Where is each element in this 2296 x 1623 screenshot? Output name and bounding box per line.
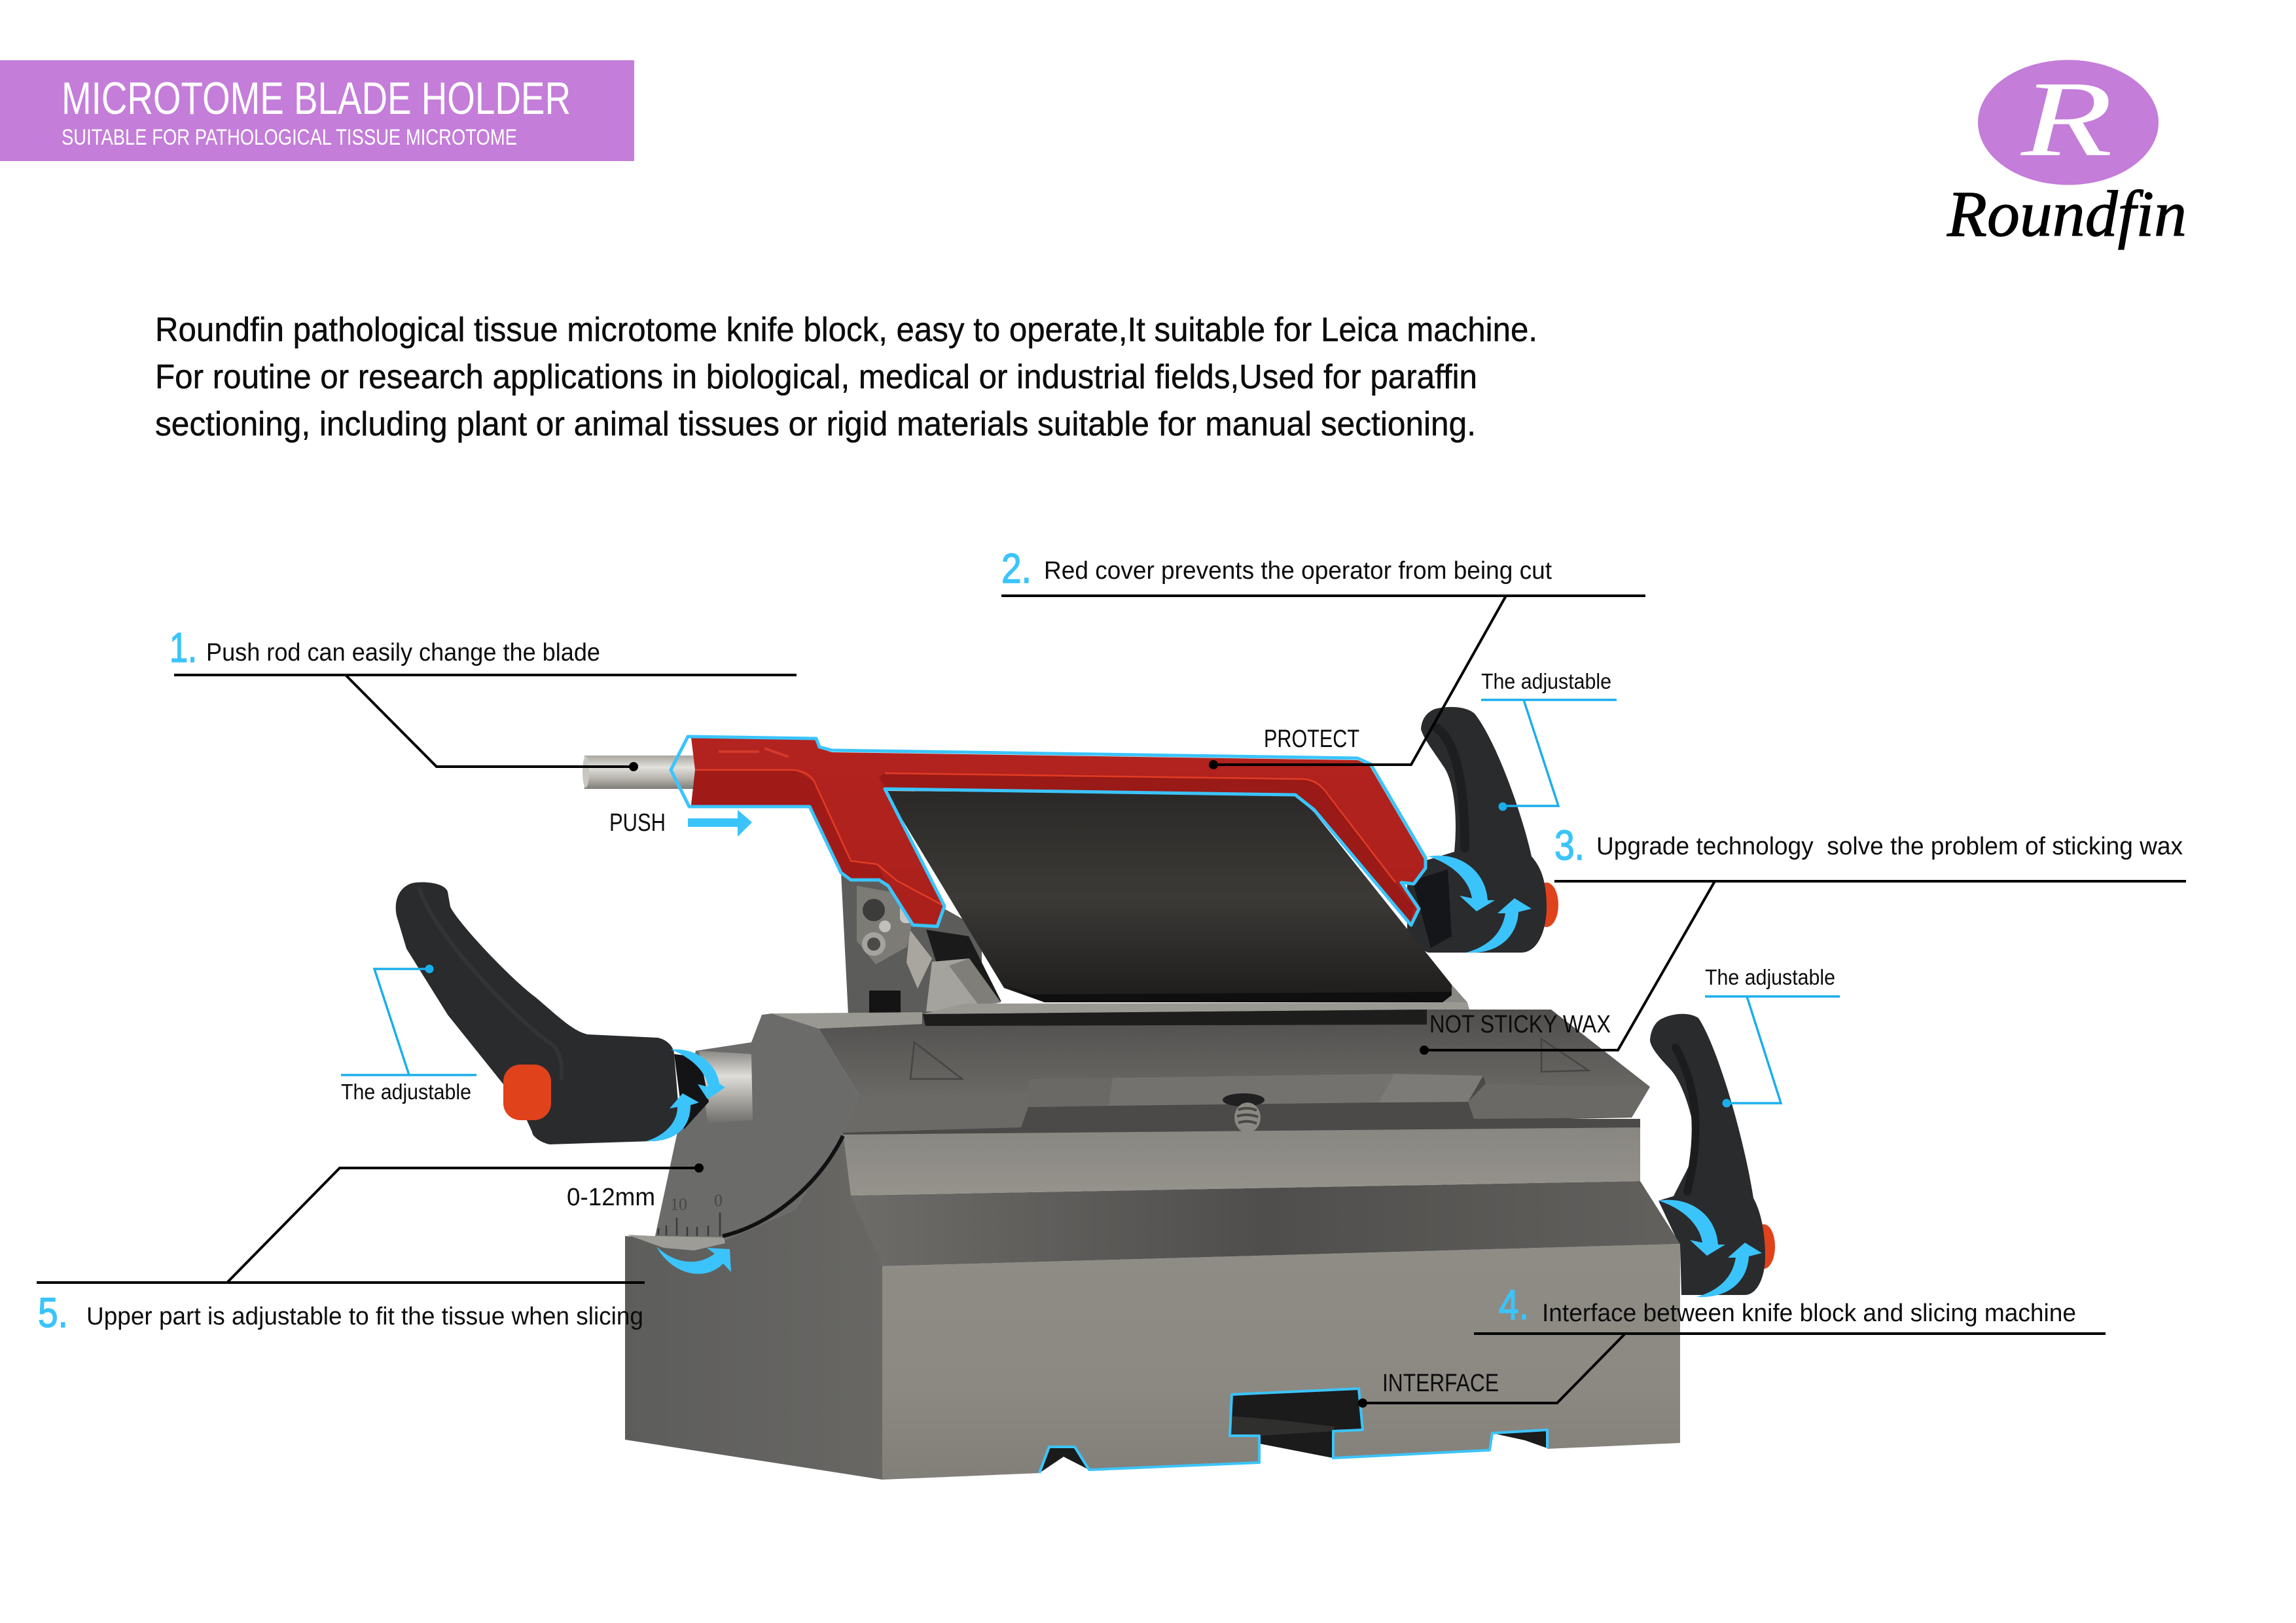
callout: left adjustable: The adjustable (341, 1080, 471, 1104)
left face (625, 1133, 882, 1480)
callout: lower right adjustable (1705, 965, 1840, 1108)
callout: left adjustable (341, 965, 476, 1104)
engraved triangles (910, 1039, 1588, 1079)
microtome blade holder illustration (396, 707, 1775, 1480)
callout 1: push rod (170, 624, 797, 771)
blade base strip (923, 985, 1469, 1014)
callout 3: upgrade technology: Upgrade technology solve the problem of sticking wax (1596, 833, 2183, 860)
left adjustable sector with scale: 0 (714, 1191, 723, 1210)
black blade cover plate (885, 791, 1452, 1002)
arrow: upper right up (1466, 898, 1532, 953)
label: 0-12mm: 0-12mm (567, 1184, 655, 1211)
callout 4: interface (1358, 1281, 2106, 1408)
logo: Roundfin: R (2020, 59, 2113, 179)
rotation arrows (646, 856, 1762, 1297)
cyan highlight around red cover (671, 737, 1426, 926)
callout 2: red cover: Red cover prevents the operator from being cut (1044, 557, 1552, 585)
logo: Roundfin: Roundfin (1946, 177, 2187, 250)
light band (843, 1119, 1640, 1195)
callout 1: push rod: 1. (170, 624, 197, 671)
red protective cover (583, 738, 1424, 924)
front face (882, 1244, 1680, 1480)
left adjustable sector with scale (627, 1013, 859, 1250)
callout 3: upgrade technology (1420, 822, 2186, 1055)
subtitle: SUITABLE FOR PATHOLOGICAL TISSUE MICROTOME (62, 125, 517, 150)
groove (843, 1103, 1640, 1135)
threaded hole (1223, 1093, 1265, 1133)
machine upper block (772, 1010, 1650, 1133)
lower right adjustable handle (1650, 1014, 1775, 1295)
callout 4: interface: 4. (1499, 1281, 1529, 1328)
scale numbers: 10 (670, 1195, 687, 1214)
intro paragraph: sectioning, including plant or animal tissues or rigid materials suitable for manual sectioning. (155, 405, 1476, 443)
intro paragraph: For routine or research applications in biological, medical or industrial fields,Used for paraffin (155, 358, 1477, 396)
callout 5: upper part adjustable (37, 1163, 704, 1336)
callout: upper right adjustable (1481, 669, 1617, 811)
support column (841, 873, 1001, 1015)
label: PROTECT: PROTECT (1264, 725, 1359, 753)
label: NOT STICKY WAX: NOT STICKY WAX (1429, 1011, 1611, 1038)
title: MICROTOME BLADE HOLDER (62, 73, 571, 124)
callout: lower right adjustable: The adjustable (1705, 965, 1835, 989)
interface slots (1039, 1389, 1547, 1473)
arrow: left handle bottom (646, 1093, 699, 1141)
callout 2: red cover: 2. (1001, 545, 1031, 592)
arrow: lower right up (1696, 1243, 1762, 1297)
callout 4: interface: Interface between knife block and slicing machine (1542, 1300, 2076, 1327)
intro paragraph (155, 311, 1537, 443)
header banner (0, 60, 634, 161)
callout 1: push rod: Push rod can easily change the blade (206, 639, 600, 666)
arrow: lower right down (1659, 1200, 1725, 1256)
dark band (851, 1181, 1680, 1266)
arrow: left handle top (671, 1049, 725, 1099)
callout 3: upgrade technology: 3. (1554, 822, 1585, 869)
callout: upper right adjustable: The adjustable (1481, 669, 1611, 693)
push rod (583, 756, 697, 789)
label and arrow: PUSH: PUSH (609, 809, 666, 837)
interface highlight outline (1039, 1389, 1547, 1473)
label and arrow: PUSH (609, 809, 752, 837)
intro paragraph: Roundfin pathological tissue microtome knife block, easy to operate,It suitable for Leica machine. (155, 311, 1537, 349)
label: INTERFACE: INTERFACE (1382, 1370, 1499, 1397)
logo: Roundfin (1946, 59, 2187, 250)
arrow: upper right down (1428, 856, 1495, 911)
callout 2: red cover (1001, 545, 1645, 769)
arrow: scale (656, 1247, 731, 1274)
left adjustable handle (396, 883, 709, 1144)
callout 5: upper part adjustable: 5. (38, 1289, 68, 1336)
machine lower block (625, 1103, 1680, 1480)
upper right adjustable handle (1407, 707, 1558, 953)
silver collar (699, 1051, 753, 1123)
callout 5: upper part adjustable: Upper part is adjustable to fit the tissue when slicing (86, 1303, 643, 1330)
